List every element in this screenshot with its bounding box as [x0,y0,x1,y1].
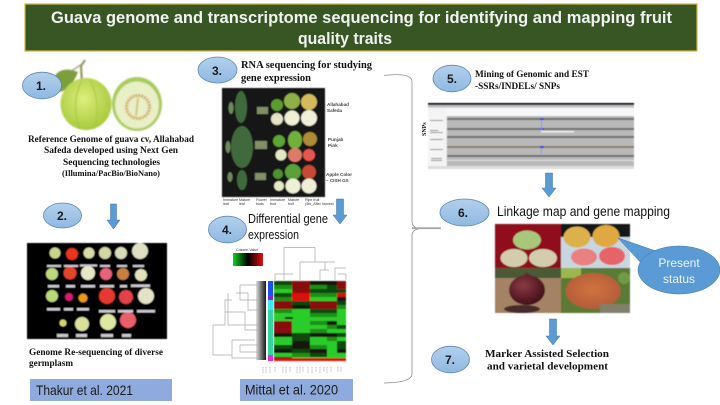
module colour bar [268,281,273,361]
text: genome re-sequencing caption: germplasm [29,358,74,368]
photo labels: tissue stages: fruit [270,202,276,206]
photo labels: tissue stages: Immature [223,198,238,202]
photo labels: tissue stages: (5th_After harvest [305,202,334,206]
citation box: Thakur et al. 2021 [30,379,172,401]
text: marker assisted selection [485,349,609,372]
callout: present status: status [663,272,695,286]
photo: red-blush guava [561,268,630,313]
text: mining of genomic and EST: Mining of Genomic and EST [475,70,590,80]
rotated SNPs label: SNPs [422,122,428,136]
photo labels: cultivars: Safeda [327,108,343,113]
citation box: Mittal et al. 2020 [240,379,353,401]
text: reference genome description: Sequencing technologies [63,157,161,167]
step 5 badge [433,65,471,92]
text: RNA sequencing heading [241,60,373,84]
photo: white guava on red [495,224,561,268]
citation box: Mittal et al. 2020: Mittal et al. 2020 [245,382,338,398]
arrow: step 5 to step 6 [542,173,556,197]
brace connecting expression work to mapping [384,75,420,383]
step 3 badge [198,57,237,83]
left dendrogram [213,281,266,360]
callout: present status [618,238,720,294]
photo labels: cultivars: Apple Color [326,172,352,177]
text: linkage map and gene mapping: Linkage map and gene mapping [497,203,670,219]
text: RNA sequencing heading: RNA sequencing for studying [241,60,373,71]
text: mining of genomic and EST: -SSRs/INDELs/ SNPs [475,82,560,92]
text: genome re-sequencing caption: Genome Re-sequencing of diverse [29,347,163,357]
text: reference genome description [28,134,194,178]
citation box: Thakur et al. 2021: Thakur et al. 2021 [36,382,133,398]
top dendrogram [275,248,346,280]
photo labels: tissue stages: Ripe fruit [305,198,319,202]
photo: maroon guava [495,268,561,313]
photo labels: tissue stages: Mature [239,198,250,202]
step 2 badge: 2. [57,209,67,223]
photo labels: tissue stages: leaf [239,202,245,206]
photo labels: cultivars [326,102,352,183]
text: mining of genomic and EST [475,70,590,92]
photo labels: cultivars: Punjab [328,137,344,142]
step 3 badge: 3. [212,64,222,78]
step 6 badge: 6. [458,206,468,220]
step 6 badge [440,199,489,226]
photo: pink-fleshed guava [561,224,630,268]
photo labels: cultivars: Allahabad [327,102,349,107]
arrow: step 1 to step 2 [107,204,120,229]
step 4 badge: 4. [222,223,232,237]
connector: brace to step 6 [412,227,441,229]
arrow: step 3 to step 4 [333,199,347,224]
step 5 badge: 5. [447,72,457,86]
callout: present status: Present [658,256,700,270]
photo labels: tissue stages [223,198,334,206]
heatmap colour key: Column Value [236,248,258,252]
image: guava fruit and cut slice [54,60,162,131]
text: differential gene expression: Differential gene [248,211,328,226]
text: RNA sequencing heading: gene expression [241,73,311,84]
step 4 badge [208,216,246,243]
photo labels: tissue stages: buds [256,202,264,206]
step 1 badge [22,72,62,99]
image: guava tissue samples [222,88,325,197]
title banner: quality traits [298,29,392,48]
photo labels: cultivars: Pink [328,143,338,148]
step 7 badge: 7. [445,353,455,367]
step 1 badge: 1. [36,79,46,93]
sample labels [263,367,341,373]
text: reference genome description: (Illumina/PacBio/BioNano) [62,168,160,178]
photo labels: cultivars: – CISH GS [326,178,349,183]
chart: clustered heatmap [213,248,346,373]
step 7 badge [432,346,470,373]
photo labels: tissue stages: Mature [288,198,299,202]
arrow: step 6 to step 7 [546,319,560,345]
image: SNP genome browser screenshot [428,103,634,169]
text: marker assisted selection: and varietal development [487,362,609,372]
text: reference genome description: Safeda developed using Next Gen [44,145,178,155]
step 2 badge [44,203,82,228]
photo labels: tissue stages: fruit [288,202,294,206]
image: germplasm fruit slices on black [27,243,167,339]
text: genome re-sequencing caption [29,347,163,368]
photo labels: tissue stages: Flower [256,198,268,202]
text: differential gene expression: expression [248,227,299,242]
text: marker assisted selection: Marker Assisted Selection [485,349,609,360]
title banner [25,4,697,51]
heatmap cells [274,281,346,361]
photo labels: tissue stages: leaf [223,202,229,206]
text: differential gene expression [248,211,328,242]
title banner: Guava genome and transcriptome sequencing for identifying and mapping fruit [51,8,672,27]
text: reference genome description: Reference Genome of guava cv, Allahabad [28,134,194,144]
photo labels: tissue stages: Immature [270,198,285,202]
photo collage: four guava varieties [495,224,630,313]
